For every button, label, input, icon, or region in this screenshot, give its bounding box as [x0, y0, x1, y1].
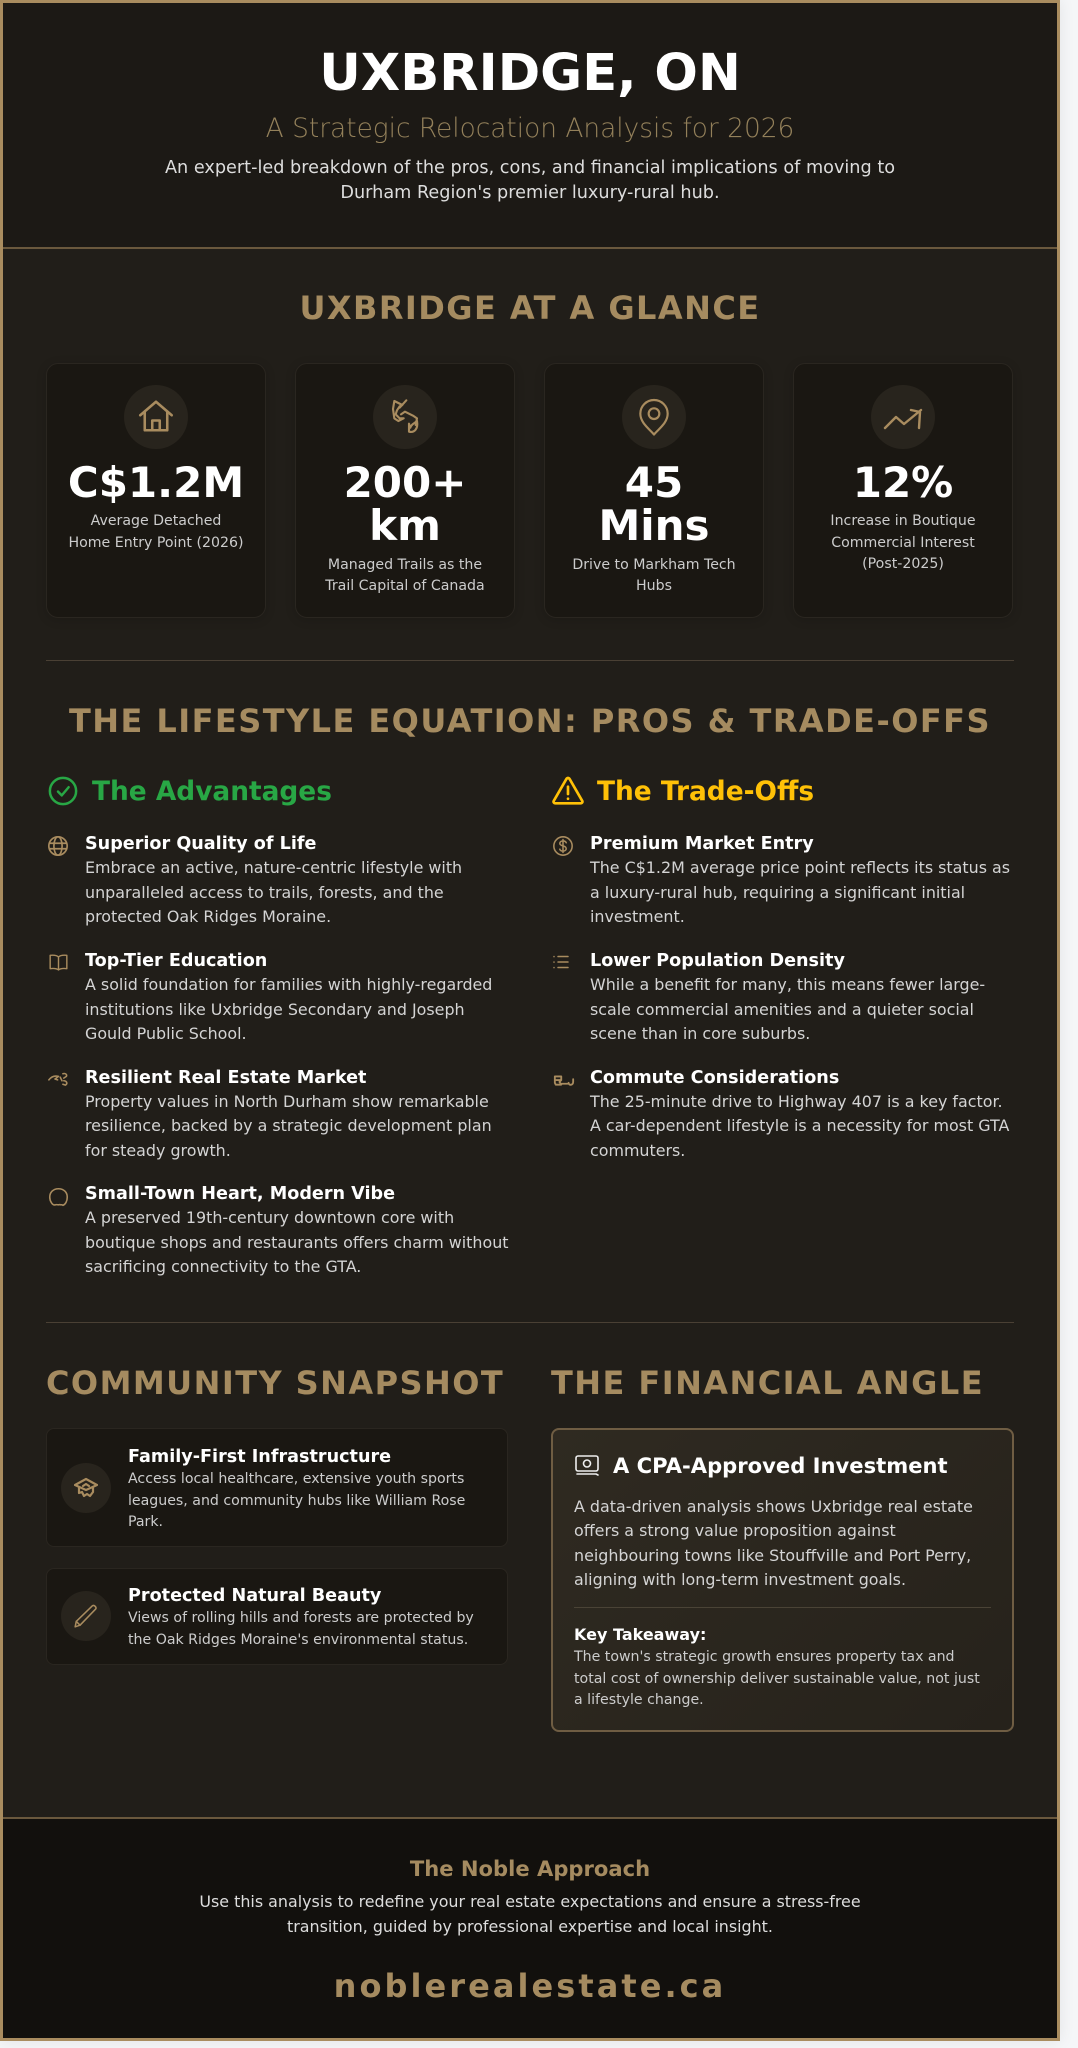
stat card: commercial interest	[793, 362, 1013, 618]
stat label: Home Entry Point (2026)	[68, 534, 244, 550]
advantage: real estate: resilience, backed by a strategic development plan	[85, 1116, 492, 1135]
stat value: Mins	[598, 501, 710, 550]
advantage: small town: A preserved 19th-century downtown core with	[85, 1208, 454, 1227]
stat label	[325, 556, 485, 594]
callout body: offers a strong value proposition against	[574, 1521, 896, 1540]
trade-off: commute: commuters.	[590, 1140, 685, 1160]
stat label: (Post-2025)	[862, 556, 944, 572]
icon: warning triangle	[552, 776, 584, 805]
stat label	[68, 513, 244, 550]
heading: lifestyle equation: THE LIFESTYLE EQUATION: PROS & TRADE-OFFS	[69, 702, 991, 740]
advantage: small town	[85, 1184, 509, 1276]
stat value: 12%	[853, 458, 953, 507]
card text	[128, 1447, 465, 1530]
community card: family	[46, 1428, 508, 1546]
advantage: real estate: for steady growth.	[85, 1140, 231, 1160]
advantage: real estate: Resilient Real Estate Market	[85, 1068, 366, 1088]
key takeaway: total cost of ownership deliver sustainable value, not just	[574, 1670, 980, 1686]
callout heading: A CPA-Approved Investment	[613, 1452, 948, 1478]
icon: open book	[49, 954, 68, 971]
icon: house	[124, 385, 188, 449]
stat value: C$1.2M	[68, 458, 244, 507]
key takeaway: The town's strategic growth ensures property tax and	[574, 1649, 955, 1665]
footer heading: The Noble Approach	[410, 1856, 650, 1881]
trade-off: commute	[590, 1068, 1010, 1160]
trade-off: density	[590, 951, 985, 1043]
key takeaway	[574, 1624, 980, 1708]
subtitle: A Strategic Relocation Analysis for 2026	[266, 113, 794, 144]
card text: Family-First Infrastructure	[128, 1447, 391, 1467]
header description: An expert-led breakdown of the pros, cons, and financial implications of moving to	[165, 158, 895, 178]
stat value	[598, 458, 710, 550]
stat label	[572, 556, 736, 594]
trade-off: density: scene than in core suburbs.	[590, 1024, 810, 1043]
community card: nature	[46, 1568, 508, 1665]
heading: at a glance: UXBRIDGE AT A GLANCE	[299, 289, 761, 327]
card text: Views of rolling hills and forests are protected by	[128, 1610, 474, 1626]
advantage: education: institutions like Uxbridge Secondary and Joseph	[85, 1000, 465, 1018]
advantage: quality of life: Superior Quality of Life	[85, 834, 316, 854]
card text: Access local healthcare, extensive youth sports	[128, 1471, 464, 1487]
stat card: trails	[295, 362, 515, 618]
stat label: Managed Trails as the	[328, 556, 482, 572]
header band	[3, 3, 1057, 249]
advantage: real estate	[85, 1068, 492, 1160]
card text: leagues, and community hubs like William Rose	[128, 1493, 465, 1509]
stat label: Hubs	[636, 578, 672, 594]
trade-offs heading: The Trade-Offs	[597, 776, 814, 807]
stat value	[344, 458, 466, 550]
card text: Protected Natural Beauty	[128, 1586, 381, 1606]
advantage: small town: Small-Town Heart, Modern Vibe	[85, 1184, 395, 1204]
icon: car route	[554, 1076, 574, 1086]
key takeaway: a lifestyle change.	[574, 1692, 704, 1708]
advantages heading: The Advantages	[92, 776, 332, 807]
header description	[165, 158, 895, 202]
callout body	[574, 1496, 973, 1589]
advantage: small town: boutique shops and restaurants offers charm without	[85, 1232, 509, 1252]
icon: banknote	[575, 1455, 599, 1476]
stat label: Increase in Boutique	[830, 513, 976, 529]
icon: speech bubble	[49, 1188, 68, 1206]
stat card: drive time	[544, 362, 764, 618]
column: trade-offs	[552, 776, 1010, 1160]
stat label	[830, 513, 976, 572]
stat label: Trail Capital of Canada	[325, 578, 485, 594]
trade-off: density: Lower Population Density	[590, 951, 845, 971]
heading: financial angle: THE FINANCIAL ANGLE	[551, 1364, 984, 1402]
trade-off: market entry: The C$1.2M average price point reflects its status as	[590, 858, 1010, 877]
key takeaway: Key Takeaway:	[574, 1624, 706, 1644]
trade-off: commute: A car-dependent lifestyle is a necessity for most GTA	[590, 1116, 1009, 1135]
stat label: Drive to Markham Tech	[572, 556, 736, 572]
panel: financial callout	[551, 1428, 1014, 1732]
callout body: aligning with long-term investment goals.	[574, 1570, 906, 1589]
column: advantages	[48, 776, 509, 1276]
icon: list	[553, 956, 569, 968]
trade-off: commute: Commute Considerations	[590, 1068, 839, 1088]
advantage: quality of life	[85, 834, 462, 926]
footer text	[199, 1892, 861, 1936]
stat value: 200+	[344, 458, 466, 507]
trade-off: density: scale commercial amenities and a quieter social	[590, 1000, 974, 1018]
advantage: quality of life: unparalleled access to trails, forests, and the	[85, 882, 444, 902]
footer text: transition, guided by professional expertise and local insight.	[287, 1916, 773, 1936]
icon: globe	[48, 836, 68, 856]
icon: pencil	[61, 1591, 111, 1641]
icon: market	[48, 1072, 68, 1086]
header description: Durham Region's premier luxury-rural hub.	[340, 182, 720, 202]
advantage: education: Top-Tier Education	[85, 951, 267, 971]
icon: check circle	[48, 776, 78, 806]
stat value: km	[369, 501, 441, 550]
heading: community snapshot: COMMUNITY SNAPSHOT	[46, 1364, 504, 1402]
card text: the Oak Ridges Moraine's environmental status.	[128, 1632, 468, 1648]
callout body: A data-driven analysis shows Uxbridge real estate	[574, 1496, 973, 1516]
trade-off: market entry: investment.	[590, 907, 685, 926]
advantage: education: Gould Public School.	[85, 1024, 247, 1043]
advantage: real estate: Property values in North Durham show remarkable	[85, 1092, 489, 1110]
trade-off: market entry: Premium Market Entry	[590, 834, 814, 854]
title: UXBRIDGE, ON	[319, 43, 741, 103]
advantage: education	[85, 951, 492, 1043]
footer band	[3, 1817, 1057, 2043]
icon: dollar circle	[553, 836, 573, 856]
footer text: Use this analysis to redefine your real estate expectations and ensure a stress-free	[199, 1892, 861, 1911]
trade-off: market entry	[590, 834, 1010, 926]
icon: trending up	[871, 385, 935, 449]
callout body: neighbouring towns like Stouffville and Port Perry,	[574, 1546, 971, 1565]
advantage: quality of life: Embrace an active, nature-centric lifestyle with	[85, 858, 462, 877]
advantage: education: A solid foundation for families with highly-regarded	[85, 975, 492, 994]
card text: Park.	[128, 1514, 163, 1530]
icon: trail	[373, 385, 437, 449]
stat value: 45	[625, 458, 683, 507]
stat card: entry price	[46, 362, 266, 618]
stat label: Average Detached	[91, 513, 221, 529]
icon: map pin	[622, 385, 686, 449]
trade-off: density: While a benefit for many, this means fewer large-	[590, 975, 985, 994]
website: noblerealestate.ca	[334, 1967, 726, 2005]
stat label: Commercial Interest	[831, 534, 975, 550]
trade-off: market entry: a luxury-rural hub, requiring a significant initial	[590, 882, 965, 902]
advantage: small town: sacrificing connectivity to the GTA.	[85, 1257, 361, 1276]
trade-off: commute: The 25-minute drive to Highway 407 is a key factor.	[590, 1092, 1003, 1110]
card text	[128, 1586, 474, 1648]
icon: graduation cap	[61, 1462, 111, 1512]
advantage: quality of life: protected Oak Ridges Moraine.	[85, 907, 331, 926]
